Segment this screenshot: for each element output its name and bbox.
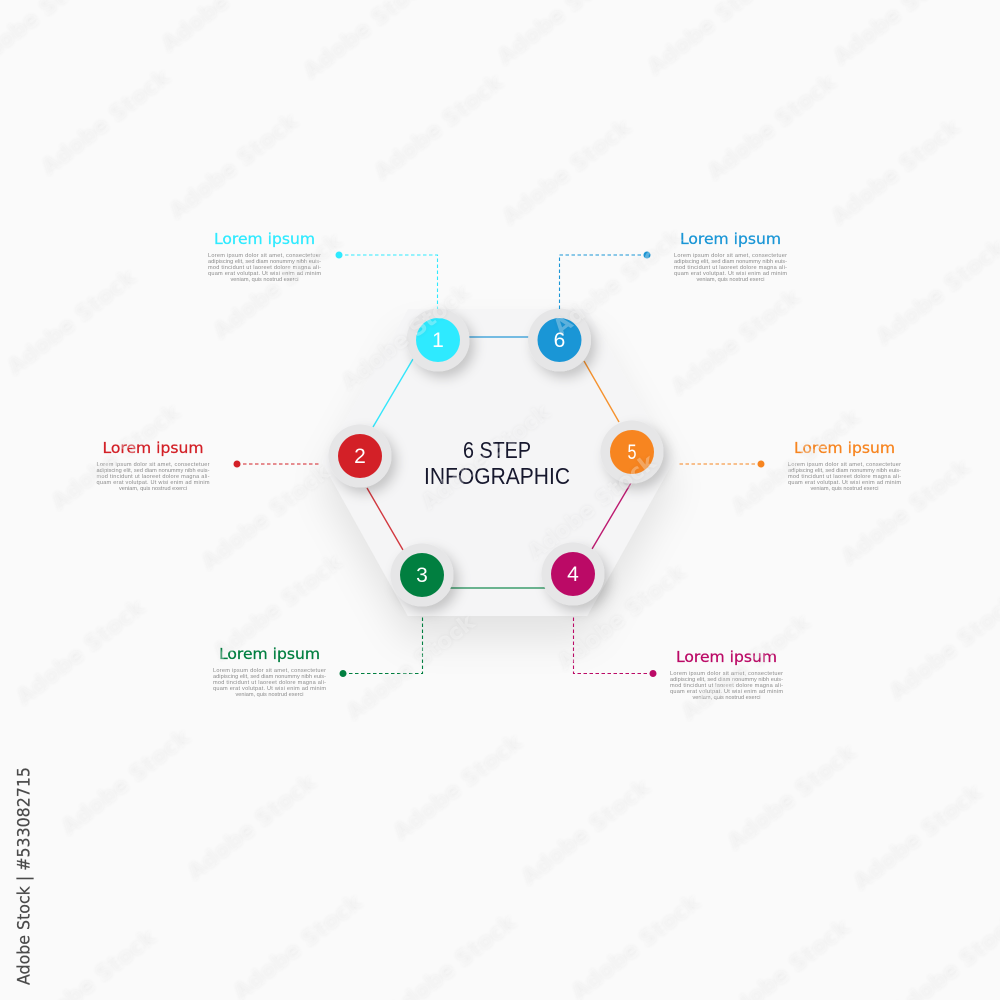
text block 4: quam erat volutpat. Ut wisi enim ad minim bbox=[670, 689, 783, 695]
text block 3: adipiscing elit, sed diam nonummy nibh euis- bbox=[213, 674, 326, 680]
watermark pattern: Adobe Stock bbox=[37, 64, 176, 181]
text block 5: adipiscing elit, sed diam nonummy nibh euis- bbox=[788, 468, 901, 474]
watermark pattern: Adobe Stock bbox=[517, 774, 656, 891]
step 3 node: 3 bbox=[416, 564, 428, 587]
text block 3: Lorem ipsum dolor sit amet, consectetuer bbox=[213, 668, 326, 674]
watermark pattern: Adobe Stock bbox=[342, 609, 481, 726]
watermark pattern: Adobe Stock bbox=[209, 549, 348, 666]
leader 5 bbox=[677, 460, 764, 468]
text block 2: veniam, quis nostrud exerci bbox=[119, 486, 187, 492]
text block 5: Lorem ipsum dolor sit amet, consectetuer bbox=[788, 462, 901, 468]
watermark pattern: Adobe Stock bbox=[370, 69, 509, 186]
leader 2 bbox=[234, 460, 320, 468]
text block 3: veniam, quis nostrud exerci bbox=[235, 692, 304, 698]
text block 5: quam erat volutpat. Ut wisi enim ad minim bbox=[788, 480, 901, 486]
watermark pattern: Adobe Stock bbox=[827, 114, 966, 231]
watermark pattern: Adobe Stock bbox=[723, 739, 862, 856]
center title: 6 STEP bbox=[463, 437, 531, 463]
watermark pattern: Adobe Stock bbox=[389, 729, 528, 846]
text block 1 bbox=[208, 230, 321, 283]
text block 3 bbox=[213, 645, 326, 698]
watermark pattern: Adobe Stock bbox=[498, 114, 637, 231]
step 5 node bbox=[600, 420, 664, 484]
watermark pattern: Adobe Stock bbox=[47, 399, 186, 516]
step 3 node bbox=[390, 544, 454, 606]
text block 5 bbox=[788, 439, 901, 492]
watermark pattern: Adobe Stock bbox=[523, 449, 662, 566]
text block 1: Lorem ipsum dolor sit amet, consectetuer bbox=[208, 253, 321, 259]
text block 5: Lorem ipsum bbox=[794, 439, 895, 457]
text block 1: mod tincidunt ut laoreet dolore magna ali- bbox=[208, 265, 321, 271]
text block 4: Lorem ipsum dolor sit amet, consectetuer bbox=[670, 671, 783, 677]
text block 1: adipiscing elit, sed diam nonummy nibh euis- bbox=[208, 259, 321, 265]
watermark pattern: Adobe Stock bbox=[57, 724, 196, 841]
text block 4: adipiscing elit, sed diam nonummy nibh euis- bbox=[670, 677, 783, 683]
leader 4 bbox=[574, 616, 656, 677]
center title: INFOGRAPHIC bbox=[424, 463, 570, 489]
text block 3: quam erat volutpat. Ut wisi enim ad minim bbox=[213, 686, 326, 692]
text block 4 bbox=[670, 648, 783, 701]
watermark pattern: Adobe Stock bbox=[703, 69, 842, 186]
text block 2: adipiscing elit, sed diam nonummy nibh euis- bbox=[96, 468, 210, 474]
text block 6 bbox=[674, 230, 787, 283]
text block 6: adipiscing elit, sed diam nonummy nibh euis- bbox=[674, 259, 787, 265]
vertical stock id label: Adobe Stock | #533082715 bbox=[14, 767, 34, 985]
watermark pattern: Adobe Stock bbox=[337, 279, 476, 396]
text block 1: quam erat volutpat. Ut wisi enim ad minim bbox=[208, 271, 321, 277]
step 4 node: 4 bbox=[567, 563, 579, 586]
step 6 node: 6 bbox=[554, 329, 565, 352]
hexagon panel bbox=[322, 309, 673, 616]
watermark pattern: Adobe Stock bbox=[183, 769, 322, 886]
text block 3: Lorem ipsum bbox=[219, 645, 320, 663]
text block 2: Lorem ipsum dolor sit amet, consectetuer bbox=[96, 462, 210, 468]
center title bbox=[424, 437, 570, 489]
watermark pattern: Adobe Stock bbox=[165, 108, 304, 225]
watermark pattern: Adobe Stock bbox=[677, 609, 816, 726]
text block 2: quam erat volutpat. Ut wisi enim ad minim bbox=[96, 480, 210, 486]
leader 6 bbox=[560, 252, 650, 309]
step 6 node bbox=[528, 308, 591, 372]
text block 5: mod tincidunt ut laoreet dolore magna ali- bbox=[788, 474, 901, 480]
watermark pattern: Adobe Stock bbox=[849, 779, 988, 896]
step 5 node: 5 bbox=[628, 441, 636, 464]
watermark pattern: Adobe Stock bbox=[837, 454, 976, 571]
step 2 node: 2 bbox=[354, 445, 366, 468]
watermark pattern: Adobe Stock bbox=[553, 559, 692, 676]
step 4 node bbox=[542, 542, 604, 606]
text block 3: mod tincidunt ut laoreet dolore magna ali- bbox=[213, 680, 326, 686]
text block 2: Lorem ipsum bbox=[102, 439, 204, 457]
text block 4: Lorem ipsum bbox=[676, 648, 777, 666]
text block 6: Lorem ipsum bbox=[680, 230, 781, 248]
text block 4: veniam, quis nostrud exerci bbox=[692, 695, 761, 701]
text block 2: mod tincidunt ut laoreet dolore magna ali- bbox=[96, 474, 210, 480]
text block 6: veniam, quis nostrud exerci bbox=[696, 277, 765, 283]
text block 4: mod tincidunt ut laoreet dolore magna ali- bbox=[670, 683, 783, 689]
leader 3 bbox=[340, 616, 422, 677]
watermark pattern: Adobe Stock bbox=[549, 224, 688, 341]
text block 1: Lorem ipsum bbox=[214, 230, 315, 248]
step 1 node bbox=[406, 308, 470, 372]
step 1 node: 1 bbox=[432, 329, 444, 352]
watermark pattern: Adobe Stock bbox=[417, 399, 556, 516]
leader 1 bbox=[336, 252, 438, 309]
watermark pattern: Adobe Stock bbox=[667, 284, 806, 401]
watermark pattern: Adobe Stock bbox=[197, 459, 336, 576]
watermark pattern: Adobe Stock bbox=[12, 594, 151, 711]
step 2 node bbox=[328, 424, 392, 488]
text block 2 bbox=[96, 439, 210, 492]
watermark pattern: Adobe Stock bbox=[727, 404, 866, 521]
text block 6: quam erat volutpat. Ut wisi enim ad minim bbox=[674, 271, 787, 277]
text block 5: veniam, quis nostrud exerci bbox=[810, 486, 879, 492]
watermark pattern: Adobe Stock bbox=[209, 228, 348, 345]
text block 1: veniam, quis nostrud exerci bbox=[230, 277, 299, 283]
connector lines between steps bbox=[367, 337, 631, 588]
text block 6: Lorem ipsum dolor sit amet, consectetuer bbox=[674, 253, 787, 259]
watermark pattern: Adobe Stock bbox=[3, 264, 142, 381]
text block 6: mod tincidunt ut laoreet dolore magna ali- bbox=[674, 265, 787, 271]
